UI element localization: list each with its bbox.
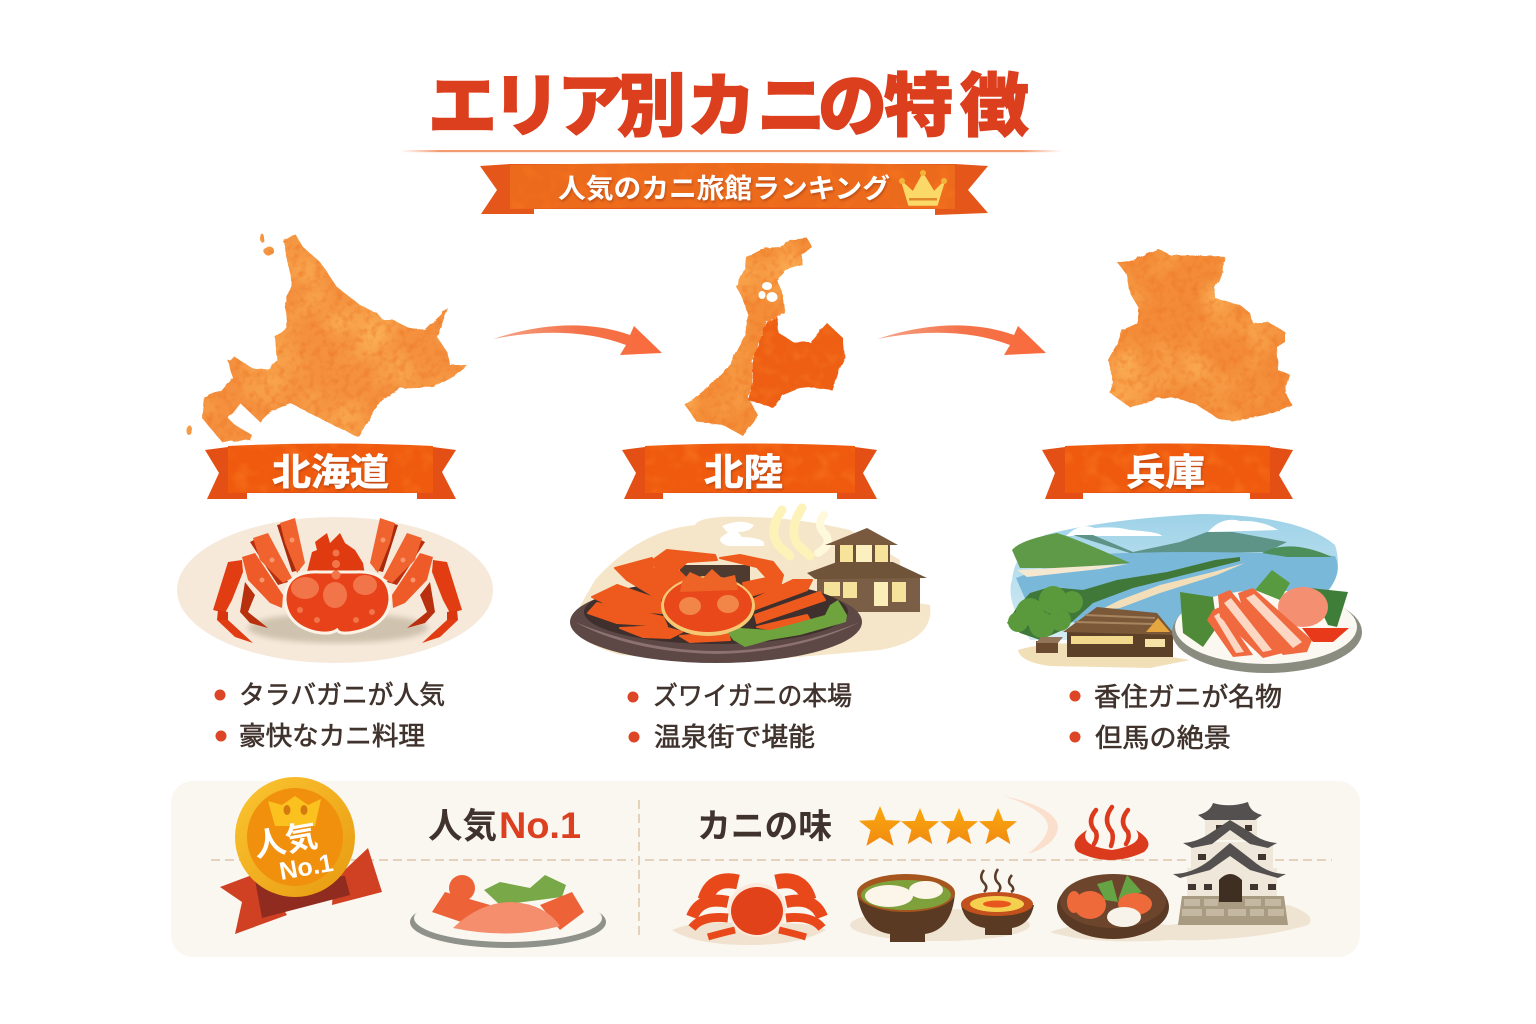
map: Hyogo <box>1108 249 1292 422</box>
heading: popularity No.1: No.1 <box>499 805 581 846</box>
ribbon: Hokuriku <box>622 442 877 499</box>
ribbon label: 兵庫 <box>1126 442 1205 496</box>
title: エリア別カニの特徴 <box>428 50 1029 150</box>
arrow: Hokkaido to Hokuriku <box>493 325 662 355</box>
bullets: Hyogo: 但馬の絶景 <box>1095 718 1231 755</box>
bullets: Hokkaido: タラバガニが人気 <box>239 675 445 712</box>
bullets: Hokuriku: 温泉街で堪能 <box>654 717 815 754</box>
bullets: Hokkaido <box>214 675 445 753</box>
ribbon: Hokkaido <box>205 442 456 499</box>
illustration: king crab <box>177 517 493 663</box>
rating stars <box>859 806 1017 846</box>
subtitle text: 人気のカニ旅館ランキング <box>558 167 890 206</box>
crescent swoosh <box>1004 796 1058 854</box>
icon: sashimi dish <box>1050 874 1310 941</box>
bullets: Hokkaido: 豪快なカニ料理 <box>239 716 425 753</box>
ribbon label: 北海道 <box>272 442 389 496</box>
heading: popularity No.1 <box>428 798 581 849</box>
bullets: Hyogo: 香住ガニが名物 <box>1094 677 1282 714</box>
icon: rice and soup bowls <box>850 869 1034 942</box>
medal <box>235 777 355 897</box>
steam <box>774 508 828 556</box>
plate <box>570 581 862 663</box>
inn <box>807 528 927 612</box>
icon: castle <box>1173 802 1288 925</box>
medal: 人気 <box>250 810 321 867</box>
water <box>1016 552 1338 640</box>
icon: crown <box>899 170 947 205</box>
medal ribbon <box>220 848 382 934</box>
garnish <box>728 600 847 647</box>
medal: No.1 <box>277 849 335 886</box>
map: Hokuriku <box>685 238 845 436</box>
island <box>1262 546 1332 557</box>
icon: onsen <box>1075 807 1148 860</box>
heading: crab flavour: カニの味 <box>697 799 832 848</box>
ribbon: Hyogo <box>1042 442 1293 499</box>
icon: crab plate <box>410 875 606 948</box>
arrow: Hokuriku to Hyogo <box>877 325 1046 355</box>
heading: popularity No.1: 人気 <box>428 798 497 849</box>
map: Toyama area <box>748 317 845 408</box>
left hill <box>1012 533 1130 568</box>
illustration: Amanohashidate scenery with crab sashimi <box>1007 514 1362 673</box>
bullets: Hokuriku: ズワイガニの本場 <box>653 676 852 713</box>
icon: small crab <box>672 881 826 945</box>
far mountains <box>1073 532 1287 554</box>
sand spit and pines <box>1100 563 1245 610</box>
sashimi plate <box>1172 591 1362 673</box>
illustration: snow crab platter and onsen inn <box>570 508 930 663</box>
map: Hokkaido <box>186 234 467 442</box>
panel: summary <box>171 777 1360 957</box>
bullets: Hyogo <box>1070 677 1282 755</box>
cloud <box>720 522 764 546</box>
bullets: Hokuriku <box>628 676 852 754</box>
clouds <box>1066 526 1162 536</box>
subtitle ribbon <box>480 163 988 215</box>
ribbon label: 北陸 <box>704 442 783 496</box>
inn <box>1036 607 1175 657</box>
